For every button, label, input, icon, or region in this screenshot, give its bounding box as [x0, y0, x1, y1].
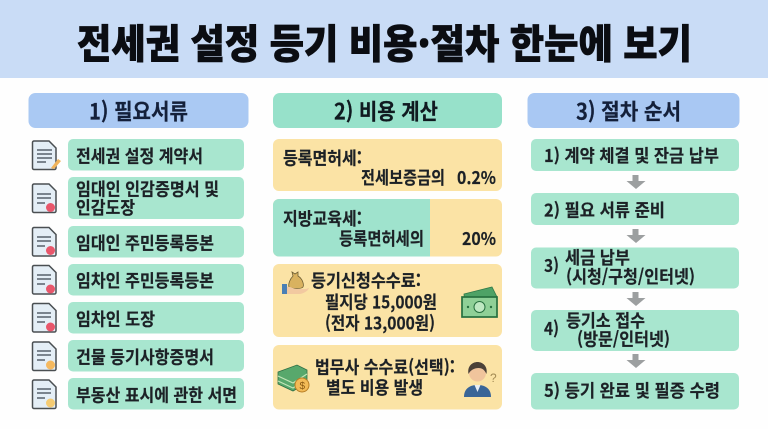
- item: lessee seal: [68, 302, 244, 334]
- card: registration application fee: (전자 13,000원): [325, 310, 435, 336]
- card: legal scrivener fee: 별도 비용 발생: [326, 375, 423, 400]
- step 4: [531, 308, 739, 352]
- heading: required documents: 1) 필요서류: [89, 94, 188, 126]
- item: property description: 부동산 표시에 관한 서면: [76, 382, 237, 408]
- panel: procedure order: [528, 93, 740, 410]
- step 3: [531, 245, 739, 289]
- icon: document with orange seal: [32, 342, 56, 370]
- step 3: 3): [544, 253, 559, 278]
- card: registration application fee: 필지당 15,000원: [325, 290, 437, 314]
- step 4: 4): [544, 316, 559, 341]
- icon: document with red seal: [32, 304, 56, 332]
- item: lease contract: 전세권 설정 계약서: [76, 144, 203, 168]
- item: lessor resident register: 임대인 주민등록등본: [76, 230, 214, 256]
- step 3: (시청/구청/인터넷): [566, 264, 695, 289]
- step 4: (방문/인터넷): [577, 326, 670, 352]
- item: building register certificate: [68, 340, 244, 372]
- icon: person with question mark: ?: [490, 371, 497, 385]
- card: local education tax: 20%: [462, 226, 496, 251]
- step 2: 2) 필요 서류 준비: [544, 198, 665, 222]
- heading: required documents: [28, 93, 248, 128]
- icon: person with question mark: [464, 362, 497, 397]
- step 3: 세금 납부: [565, 245, 630, 270]
- title: 전세권 설정 등기 비용·절차 한눈에 보기: [77, 12, 692, 70]
- item: building register certificate: 건물 등기사항증명서: [76, 344, 214, 370]
- step 4: 등기소 접수: [566, 308, 645, 333]
- card: local education tax: 등록면허세의: [339, 226, 424, 251]
- heading: procedure order: 3) 절차 순서: [576, 94, 681, 126]
- card: legal scrivener fee: [273, 345, 502, 410]
- item: lessee resident register: 임차인 주민등록등본: [76, 268, 214, 293]
- card: registration application fee: 등기신청수수료:: [311, 268, 421, 293]
- card: registration license tax: 전세보증금의: [361, 165, 445, 190]
- header banner: [0, 0, 768, 78]
- card: legal scrivener fee: 법무사 수수료(선택):: [315, 354, 455, 380]
- card: registration application fee: [273, 264, 502, 337]
- item: lessor seal certificate: 인감도장: [76, 195, 135, 220]
- heading: procedure order: [528, 93, 740, 128]
- step 5: 5) 등기 완료 및 필증 수령: [544, 378, 720, 403]
- icon: document with orange seal: [32, 380, 56, 408]
- heading: cost calculation: 2) 비용 계산: [334, 94, 438, 126]
- arrow: [626, 292, 646, 306]
- panel: required documents: [28, 93, 248, 410]
- icon: hand with money bag: [282, 272, 309, 294]
- icon: money stack and coin: $: [300, 381, 306, 392]
- card: registration license tax: 등록면허세:: [283, 146, 362, 170]
- item: lessee seal: 임차인 도장: [76, 306, 155, 332]
- icon: document with red seal: [32, 228, 56, 256]
- card: local education tax: 지방교육세:: [283, 206, 362, 231]
- arrow: [626, 354, 646, 368]
- card: registration license tax: 0.2%: [457, 165, 496, 190]
- icon: document with pen: [32, 141, 61, 170]
- item: lease contract: [68, 139, 244, 170]
- card: registration license tax: [273, 139, 502, 191]
- icon: document with red seal: [32, 266, 56, 294]
- arrow: [626, 175, 646, 189]
- item: lessor seal certificate: [68, 176, 244, 220]
- card: local education tax: [273, 199, 502, 256]
- item: lessor resident register: [68, 226, 244, 258]
- heading: cost calculation: [273, 93, 502, 128]
- icon: money stack and coin: [278, 365, 309, 392]
- step 1: 1) 계약 체결 및 잔금 납부: [544, 143, 719, 168]
- panel: cost calculation: [273, 93, 502, 410]
- step 1: [531, 139, 739, 171]
- icon: document with red seal: [32, 184, 56, 212]
- icon: banknotes: [462, 287, 497, 317]
- arrow: [626, 229, 646, 243]
- item: lessee resident register: [68, 264, 244, 296]
- step 5: [531, 373, 739, 410]
- item: lessor seal certificate: 임대인 인감증명서 및: [76, 176, 219, 202]
- step 2: [531, 193, 739, 225]
